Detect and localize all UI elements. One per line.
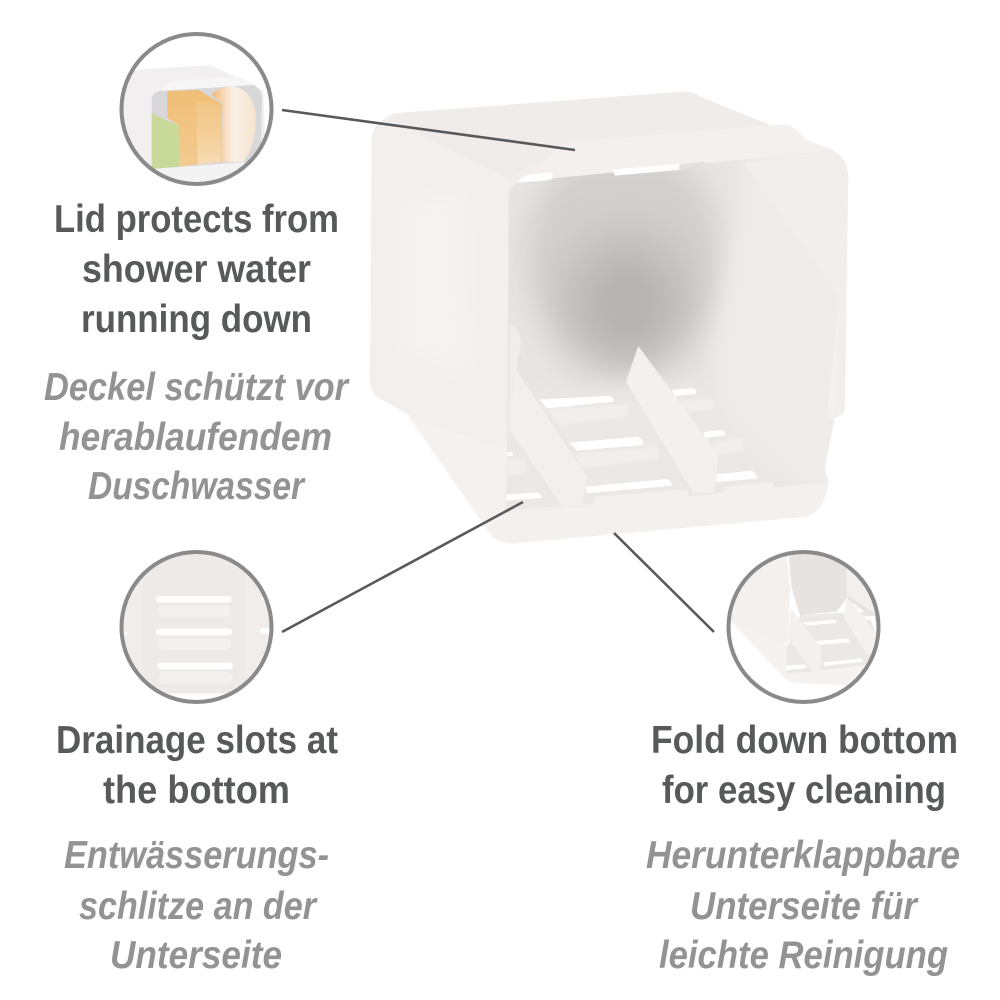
text block: fold down, German bbox=[646, 834, 960, 977]
text block: lid, English: shower water bbox=[82, 248, 311, 291]
green soap bbox=[152, 113, 179, 169]
front lip bbox=[485, 482, 825, 543]
drainage slots bbox=[503, 388, 757, 501]
left wall bbox=[731, 556, 790, 645]
surface bbox=[142, 554, 246, 694]
text block: fold down, English: for easy cleaning bbox=[662, 769, 946, 812]
text block: lid, German: Duschwasser bbox=[88, 465, 306, 508]
circle icon: drainage slots bbox=[117, 547, 277, 702]
box inner bbox=[152, 85, 262, 170]
left wall soft shading bbox=[403, 193, 467, 373]
left divider bbox=[510, 369, 587, 506]
box lid bbox=[124, 65, 265, 166]
top opening slots bbox=[517, 164, 679, 183]
orange soap front bbox=[196, 101, 223, 165]
right divider bbox=[843, 597, 877, 655]
floor bbox=[787, 612, 880, 675]
back wall shadow core bbox=[570, 240, 683, 367]
text block: lid, German: Deckel schützt vor bbox=[44, 366, 350, 409]
lid front strip bbox=[520, 125, 833, 182]
text block: lid, English: Lid protects from bbox=[54, 198, 339, 241]
leader line: fold down bottom bbox=[614, 533, 714, 632]
right rail bbox=[245, 547, 275, 693]
leader line: slots bbox=[282, 502, 523, 632]
right wall facet bbox=[743, 152, 842, 297]
floor bar highlights bbox=[507, 400, 742, 474]
circle icon: soaps inside box bbox=[122, 34, 272, 184]
right wall lower panel bbox=[827, 293, 843, 419]
text block: lid, English: running down bbox=[81, 298, 312, 341]
circle icon: fold down bottom bbox=[723, 548, 883, 702]
left rail bbox=[117, 547, 142, 693]
text block: drainage, English bbox=[56, 719, 338, 812]
right inner wall bbox=[730, 208, 760, 367]
circle ring bbox=[728, 552, 878, 702]
text block: drainage, English: the bottom bbox=[103, 769, 290, 812]
interior of box bbox=[507, 160, 835, 500]
back wall broad shade bbox=[522, 166, 722, 357]
text block: drainage, German bbox=[64, 834, 329, 977]
wedge bbox=[734, 624, 788, 673]
text block: drainage, German: Unterseite bbox=[110, 934, 282, 977]
circle ring bbox=[122, 552, 272, 702]
circle ring bbox=[122, 34, 272, 184]
box bottom bbox=[154, 162, 246, 170]
product photo: open soap box bbox=[370, 92, 860, 543]
left divider bbox=[788, 608, 819, 645]
grey tab behind top slot bbox=[680, 162, 705, 170]
floor bbox=[503, 390, 827, 527]
text block: fold down, English bbox=[651, 719, 958, 812]
text block: fold down, German: Unterseite für bbox=[690, 885, 919, 928]
lid strip bbox=[237, 77, 256, 85]
bars bbox=[157, 605, 233, 684]
text block: lid, German bbox=[44, 366, 350, 508]
text block: lid, German: herablaufendem bbox=[59, 416, 332, 459]
product body silhouette bbox=[370, 92, 848, 543]
right divider bbox=[626, 346, 718, 493]
text block: fold down, German: Herunterklappbare bbox=[646, 834, 960, 877]
left outer wall bbox=[370, 122, 512, 448]
slots bbox=[787, 616, 875, 670]
back wall bbox=[508, 160, 737, 394]
pale soap bbox=[212, 87, 256, 162]
text block: lid, English bbox=[54, 198, 339, 341]
left rim bump bbox=[508, 323, 521, 447]
text block: fold down, German: leichte Reinigung bbox=[659, 934, 948, 977]
lid top surface bbox=[393, 92, 770, 180]
text block: drainage, German: Entwässerungs- bbox=[64, 834, 329, 877]
back wall bbox=[788, 554, 876, 622]
back wall right part bbox=[847, 568, 875, 613]
text block: drainage, English: Drainage slots at bbox=[56, 719, 338, 762]
leader line: lid bbox=[282, 110, 575, 150]
text block: drainage, German: schlitze an der bbox=[79, 885, 318, 928]
orange soap bbox=[167, 90, 223, 167]
lower left wedge bbox=[407, 413, 507, 533]
front lip bbox=[783, 665, 866, 686]
text block: fold down, English: Fold down bottom bbox=[651, 719, 958, 762]
background bbox=[723, 548, 883, 698]
slots bbox=[120, 596, 273, 669]
